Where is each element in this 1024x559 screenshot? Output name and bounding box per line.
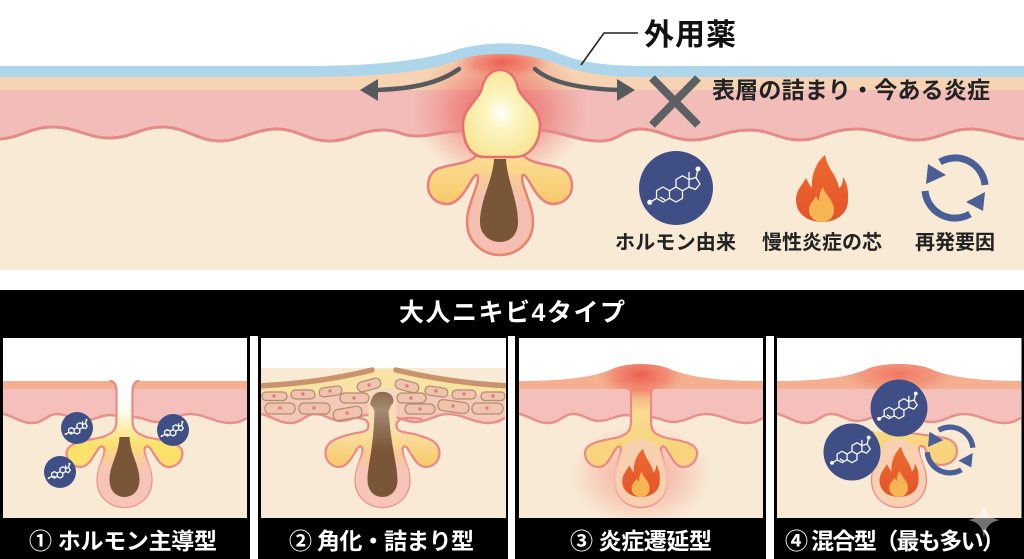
icon: flame: [796, 155, 848, 222]
watermark sparkle: [968, 502, 1000, 538]
follicle: [585, 388, 697, 507]
label: hormonal origin: ホルモン由来: [615, 231, 736, 254]
panel 4: mixed type: [777, 338, 1022, 518]
flame: [622, 449, 660, 497]
panel 3: delayed inflammation type: [519, 338, 763, 527]
hormone molecules: [44, 412, 189, 488]
panel: skin cross-section with topical medication: [0, 19, 1024, 270]
heading: topical medication: 外用薬: [644, 19, 736, 52]
black section background: [0, 290, 1024, 559]
label: core of chronic inflammation: 慢性炎症の芯: [762, 231, 882, 254]
arrow: spreading right: [535, 69, 635, 101]
inflammation glow: [412, 42, 588, 182]
follicle: [857, 432, 957, 507]
dermis wavy boundary: [0, 127, 1024, 141]
section title: 大人ニキビ4タイプ: [399, 299, 625, 327]
icon: recurrence arrows: [925, 158, 985, 218]
arrow: spreading left: [360, 69, 459, 101]
leader line: [581, 33, 638, 65]
skin cells: [262, 377, 505, 421]
recurrence arrows: [927, 427, 973, 473]
panel 1: hormone-driven type: [3, 338, 247, 518]
follicle: [66, 381, 182, 507]
top redness at the bump: [453, 44, 553, 80]
follicle with plug: [326, 388, 440, 507]
flame: [880, 447, 919, 497]
caption 3: ③ 炎症遷延型: [570, 528, 712, 554]
hormone molecules: [824, 380, 928, 480]
caption 2: ② 角化・詰まり型: [289, 528, 474, 554]
glow around the sac: [579, 432, 703, 518]
pimple follicle with lobes: [428, 70, 572, 255]
bump with redness: [519, 364, 763, 396]
panel 2: keratin clog type: [258, 338, 510, 518]
white divider strips: [250, 336, 774, 559]
blue topical medication layer: [0, 43, 1024, 77]
caption 4: ④ 混合型（最も多い）: [785, 528, 1005, 554]
bump with redness: [777, 364, 1022, 389]
stratum corneum arcs: [258, 370, 510, 386]
label: surface clog and current inflammation: 表層の詰まり・今ある炎症: [712, 77, 990, 103]
icon: cross mark: [652, 78, 698, 125]
caption 1: ① ホルモン主導型: [29, 528, 217, 554]
label: recurrence factor: 再発要因: [915, 231, 995, 254]
icon: hormone molecule: [639, 151, 713, 225]
